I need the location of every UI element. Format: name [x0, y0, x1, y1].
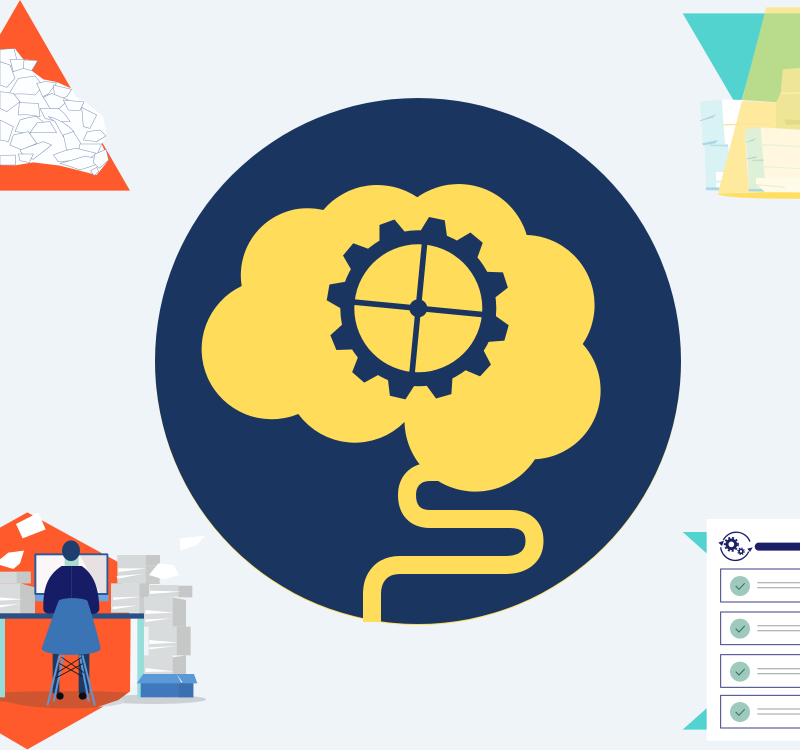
central navy circle with brain: [155, 98, 681, 625]
teal triangle: [683, 13, 766, 100]
person: [43, 540, 99, 700]
desk legs: [0, 619, 144, 697]
green overlap: [742, 13, 800, 102]
header bar: [755, 543, 800, 551]
flying papers: [0, 513, 206, 579]
checklist row 1: [721, 569, 800, 602]
white sheet: [707, 519, 800, 741]
orange hexagon: [0, 512, 131, 749]
paper pile: [0, 49, 109, 176]
checklist row 2: [721, 612, 800, 645]
yellow stack, right: [776, 68, 800, 130]
yellow rim: [155, 99, 681, 625]
teal corner top: [683, 532, 707, 554]
illustration: worker at desk among paper stacks: [0, 512, 206, 749]
checklist row 4: [721, 695, 800, 728]
brain stem: [372, 472, 534, 622]
paper stack: centre: [111, 555, 160, 613]
brain: [202, 184, 601, 492]
paper stack: left: [0, 572, 35, 613]
checklist row 3: [721, 655, 800, 687]
gear: [326, 216, 510, 401]
cardboard box: [137, 674, 197, 697]
navy disc: [155, 98, 681, 624]
floor shadow: [0, 691, 206, 708]
teal corner bottom: [683, 708, 707, 730]
monitor: [34, 553, 109, 601]
white paper stack: [722, 99, 743, 160]
yellow ellipse base: [718, 192, 800, 199]
chair: [42, 598, 101, 705]
paper stack: right: [144, 585, 192, 674]
gear spokes: [347, 237, 489, 379]
illustration: paper pile on orange triangle: [0, 0, 130, 191]
process gears icon: [718, 532, 753, 560]
illustration: process checklist: [683, 519, 800, 741]
illustration: paper stacks under teal and yellow cone: [683, 7, 800, 199]
cream paper stack: [756, 127, 800, 194]
yellow beam lower: [718, 101, 780, 194]
pale green paper stack: [745, 127, 766, 193]
yellow beam top: [765, 7, 800, 13]
desk top: [0, 613, 144, 619]
orange triangle: [0, 0, 130, 191]
pale teal paper stack: [699, 99, 730, 192]
